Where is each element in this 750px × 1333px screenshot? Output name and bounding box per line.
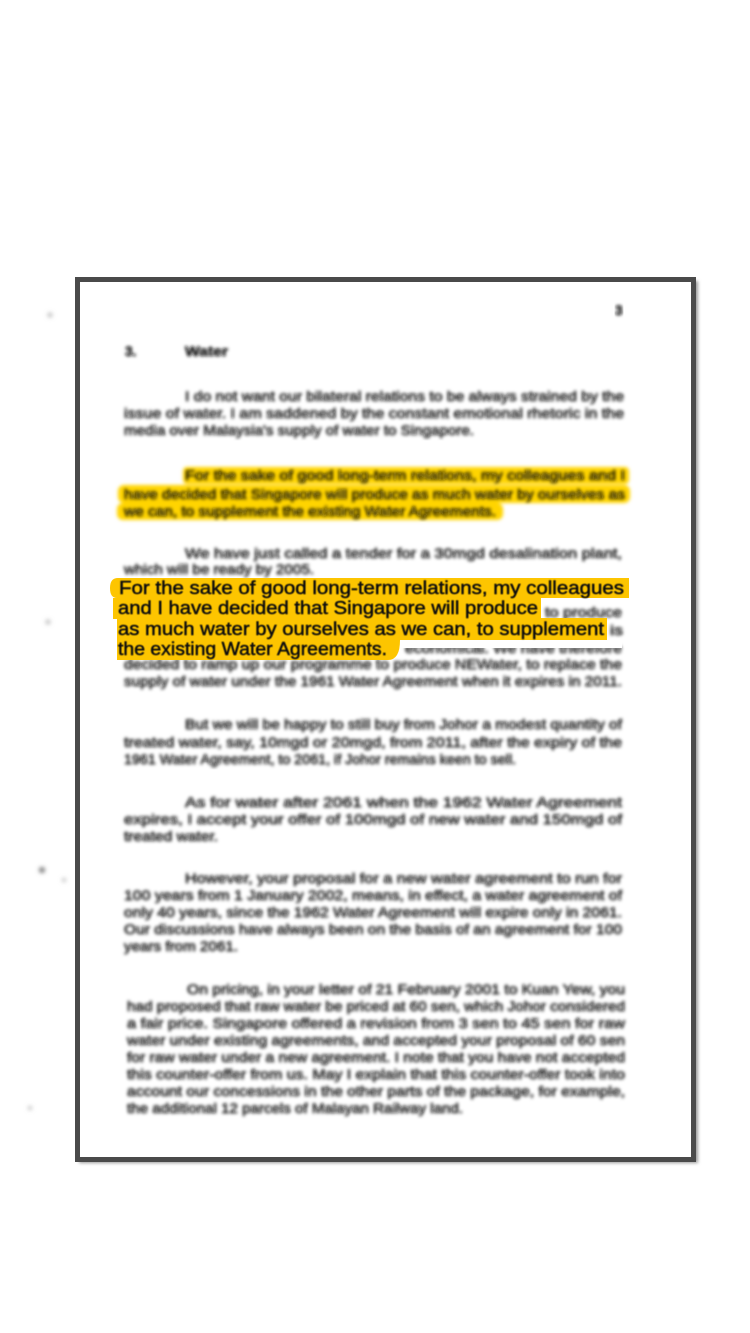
paragraph: bilateral relations: I do not want our bilateral relations to be always strained by the: [185, 389, 624, 404]
paragraph: bilateral relations: issue of water. I am saddened by the constant emotional rhetoric in the: [124, 406, 624, 421]
paragraph: pricing: a fair price. Singapore offered a revision from 3 sen to 45 sen for raw: [127, 1016, 625, 1031]
paragraph: bilateral relations: [124, 389, 624, 438]
paragraph: water after 2061: [124, 795, 622, 844]
paragraph: 100-year agreement: [124, 871, 623, 954]
paragraph: desalination and NEWater: is: [610, 623, 623, 638]
paragraph: 100-year agreement: years from 2061.: [124, 939, 238, 954]
section heading: [125, 344, 229, 359]
paragraph: buying treated water from Johor: [124, 717, 622, 767]
paragraph: pricing: On pricing, in your letter of 21 February 2001 to Kuan Yew, you: [187, 982, 625, 997]
paragraph: 100-year agreement: 100 years from 1 January 2002, means, in effect, a water agreement of: [124, 888, 622, 903]
enlarged highlighted callout: For the sake of good long-term relations, my colleagues: [119, 578, 624, 598]
enlarged highlighted callout: as much water by ourselves as we can, to supplement: [118, 619, 604, 639]
paragraph: desalination and NEWater: We have just called a tender for a 30mgd desalination plant,: [185, 546, 622, 561]
paragraph: buying treated water from Johor: But we will be happy to still buy from Johor a modest quantity of: [185, 717, 622, 732]
paragraph: pricing: the additional 12 parcels of Malayan Railway land.: [127, 1101, 463, 1116]
enlarged highlighted callout: and I have decided that Singapore will produce: [118, 598, 538, 618]
highlighted paragraph in the document: we can, to supplement the existing Water Agreements.: [123, 504, 496, 519]
highlighted paragraph in the document: have decided that Singapore will produce as much water by ourselves as: [124, 487, 625, 502]
highlighted paragraph in the document: [117, 467, 630, 520]
page number: 3: [615, 303, 623, 318]
paragraph: desalination and NEWater: to produce: [545, 605, 622, 620]
section heading: 3.: [125, 344, 136, 359]
paragraph: water after 2061: As for water after 2061 when the 1962 Water Agreement: [185, 795, 622, 810]
document page frame: [78, 280, 698, 1163]
paragraph: desalination and NEWater: supply of water under the 1961 Water Agreement when it expires in 2011.: [124, 674, 622, 689]
paragraph: 100-year agreement: However, your proposal for a new water agreement to run for: [185, 871, 623, 886]
paragraph: water after 2061: treated water.: [124, 829, 218, 844]
paragraph: pricing: for raw water under a new agreement. I note that you have not accepted: [127, 1050, 625, 1065]
highlighted paragraph in the document: For the sake of good long-term relations, my colleagues and I: [185, 468, 625, 483]
paragraph: desalination and NEWater: decided to ramp up our programme to produce NEWater, to replace the: [124, 657, 622, 672]
enlarged highlighted callout: the existing Water Agreements.: [118, 639, 387, 659]
paragraph: bilateral relations: media over Malaysia's supply of water to Singapore.: [124, 423, 474, 438]
paragraph: buying treated water from Johor: 1961 Water Agreement, to 2061, if Johor remains keen to sell.: [124, 752, 516, 767]
paragraph: pricing: this counter-offer from us. May I explain that this counter-offer took into: [127, 1067, 625, 1082]
paragraph: pricing: account our concessions in the other parts of the package, for example,: [127, 1084, 625, 1099]
paragraph: pricing: water under existing agreements, and accepted your proposal of 60 sen: [126, 1033, 625, 1048]
paragraph: desalination and NEWater: [123, 546, 623, 689]
paragraph: 100-year agreement: only 40 years, since the 1962 Water Agreement will expire only in 2061.: [124, 905, 622, 920]
paragraph: pricing: had proposed that raw water be priced at 60 sen, which Johor considered: [127, 999, 625, 1014]
paragraph: water after 2061: expires, I accept your offer of 100mgd of new water and 150mgd of: [124, 812, 622, 827]
paragraph: 100-year agreement: Our discussions have always been on the basis of an agreement for 100: [124, 922, 622, 937]
paragraph: pricing: [126, 982, 625, 1116]
enlarged highlighted callout: [110, 578, 629, 660]
paragraph: desalination and NEWater: economical. We have therefore: [405, 641, 622, 656]
paragraph: buying treated water from Johor: treated water, say, 10mgd or 20mgd, from 2011, after the expiry of the: [124, 735, 622, 750]
paragraph: desalination and NEWater: which will be ready by 2005.: [123, 562, 314, 577]
section heading: Water: [185, 344, 229, 359]
